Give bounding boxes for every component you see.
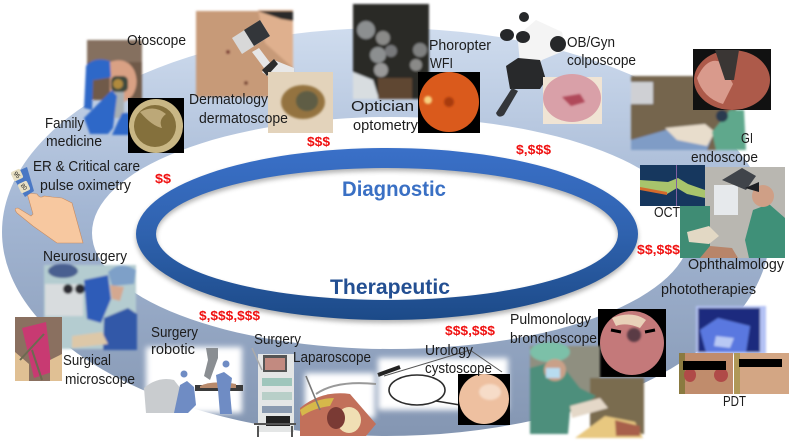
inset: retinal fundus (418, 72, 480, 133)
label: ER & Critical care pulse oximetry: pulse oximetry (40, 178, 132, 194)
label: Phoropter WFI (429, 38, 491, 72)
device: laparoscopic tower (252, 348, 296, 437)
label: Pulmonology bronchoscope (510, 312, 597, 347)
cost: $,$$$: $,$$$ (516, 143, 551, 157)
inset: cervix view (543, 74, 602, 124)
label: Pulmonology bronchoscope: Pulmonology (510, 312, 592, 328)
label: Laparoscope: Laparoscope (293, 350, 371, 366)
photos: PDT before and after (679, 353, 789, 394)
chart: OCT scan (640, 165, 705, 206)
label: Surgery robotic (151, 325, 199, 358)
heading: Therapeutic: Therapeutic (330, 276, 450, 299)
label: Phoropter WFI: WFI (430, 56, 453, 72)
label: GI endoscope: GI (741, 131, 753, 147)
label: Optician optometry (351, 99, 419, 134)
label: Family medicine (45, 116, 102, 150)
label: Pulmonology bronchoscope: bronchoscope (510, 331, 597, 347)
label: Surgical microscope: microscope (65, 372, 135, 388)
label: OB/Gyn colposcope: OB/Gyn (567, 35, 615, 51)
photo: surgical field (15, 317, 62, 381)
inset: ear canal view (128, 98, 184, 153)
label: Dermatology dermatoscope: dermatoscope (199, 111, 288, 127)
label: OCT: OCT (654, 205, 680, 221)
inset: pigmented lesion (268, 72, 333, 133)
label: Surgery robotic: robotic (151, 342, 195, 358)
label: GI endoscope: endoscope (691, 150, 758, 166)
label: Surgical microscope (63, 353, 135, 388)
device: cystoscope on white (378, 350, 508, 410)
cost: $$,$$$: $$,$$$ (637, 243, 680, 257)
photo: neurosurgery microscope (44, 264, 137, 350)
icon: hand with pulse oximeter: 95 (12, 171, 21, 181)
illustration: robotic surgery (144, 347, 243, 414)
label: Urology cystoscope: cystoscope (425, 361, 492, 377)
label: Phoropter WFI: Phoropter (429, 38, 491, 54)
inset: bladder view (458, 374, 510, 425)
label: Otoscope: Otoscope (127, 33, 186, 49)
photo: dermatoscope on skin (196, 10, 294, 97)
label: Dermatology dermatoscope: Dermatology (189, 92, 269, 108)
label: Surgical microscope: Surgical (63, 353, 111, 369)
device: colposcope (496, 12, 566, 117)
cost: $,$$$,$$$: $,$$$,$$$ (199, 309, 260, 323)
label: phototherapies: phototherapies (661, 282, 756, 298)
label: Urology cystoscope (425, 343, 492, 377)
inset: bronchoscopic view (598, 309, 666, 377)
icon: hand with pulse oximeter (10, 167, 83, 243)
photo: otoscope exam (84, 40, 142, 135)
label: Optician optometry: optometry (353, 118, 419, 134)
heading: Diagnostic: Diagnostic (342, 178, 446, 201)
label: OB/Gyn colposcope (567, 35, 636, 69)
cost: $$$,$$$: $$$,$$$ (445, 324, 495, 338)
label: Ophthalmology: Ophthalmology (688, 257, 785, 273)
label: Neurosurgery: Neurosurgery (43, 249, 128, 265)
label: Family medicine: Family (45, 116, 85, 132)
label: GI endoscope (691, 131, 758, 166)
label: ER & Critical care pulse oximetry (33, 159, 140, 194)
photo: bronchoscopy procedure (530, 342, 644, 438)
photo: phoropter (353, 4, 429, 99)
label: Urology cystoscope: Urology (425, 343, 474, 359)
illustration: laparoscope (300, 373, 376, 436)
label: ER & Critical care pulse oximetry: ER & Critical care (33, 159, 140, 175)
inset: endoscopic view (693, 49, 771, 110)
label: Family medicine: medicine (46, 134, 102, 150)
icon: hand with pulse oximeter: 80 (19, 183, 28, 193)
label: PDT: PDT (723, 394, 746, 410)
cost: $$: $$ (155, 172, 171, 186)
label: Dermatology dermatoscope (189, 92, 288, 127)
photo: GI endoscopy room (631, 76, 746, 150)
photo: phototherapy lamp (696, 306, 766, 354)
inner ring: diagnostic to therapeutic (136, 148, 638, 323)
label: Surgery: Surgery (254, 332, 302, 348)
label: Surgery robotic: Surgery (151, 325, 199, 341)
label: Optician optometry: Optician (351, 99, 414, 115)
cost: $$$: $$$ (307, 135, 330, 149)
label: OB/Gyn colposcope: colposcope (567, 53, 636, 69)
photo: ophthalmology microscope (680, 167, 785, 258)
